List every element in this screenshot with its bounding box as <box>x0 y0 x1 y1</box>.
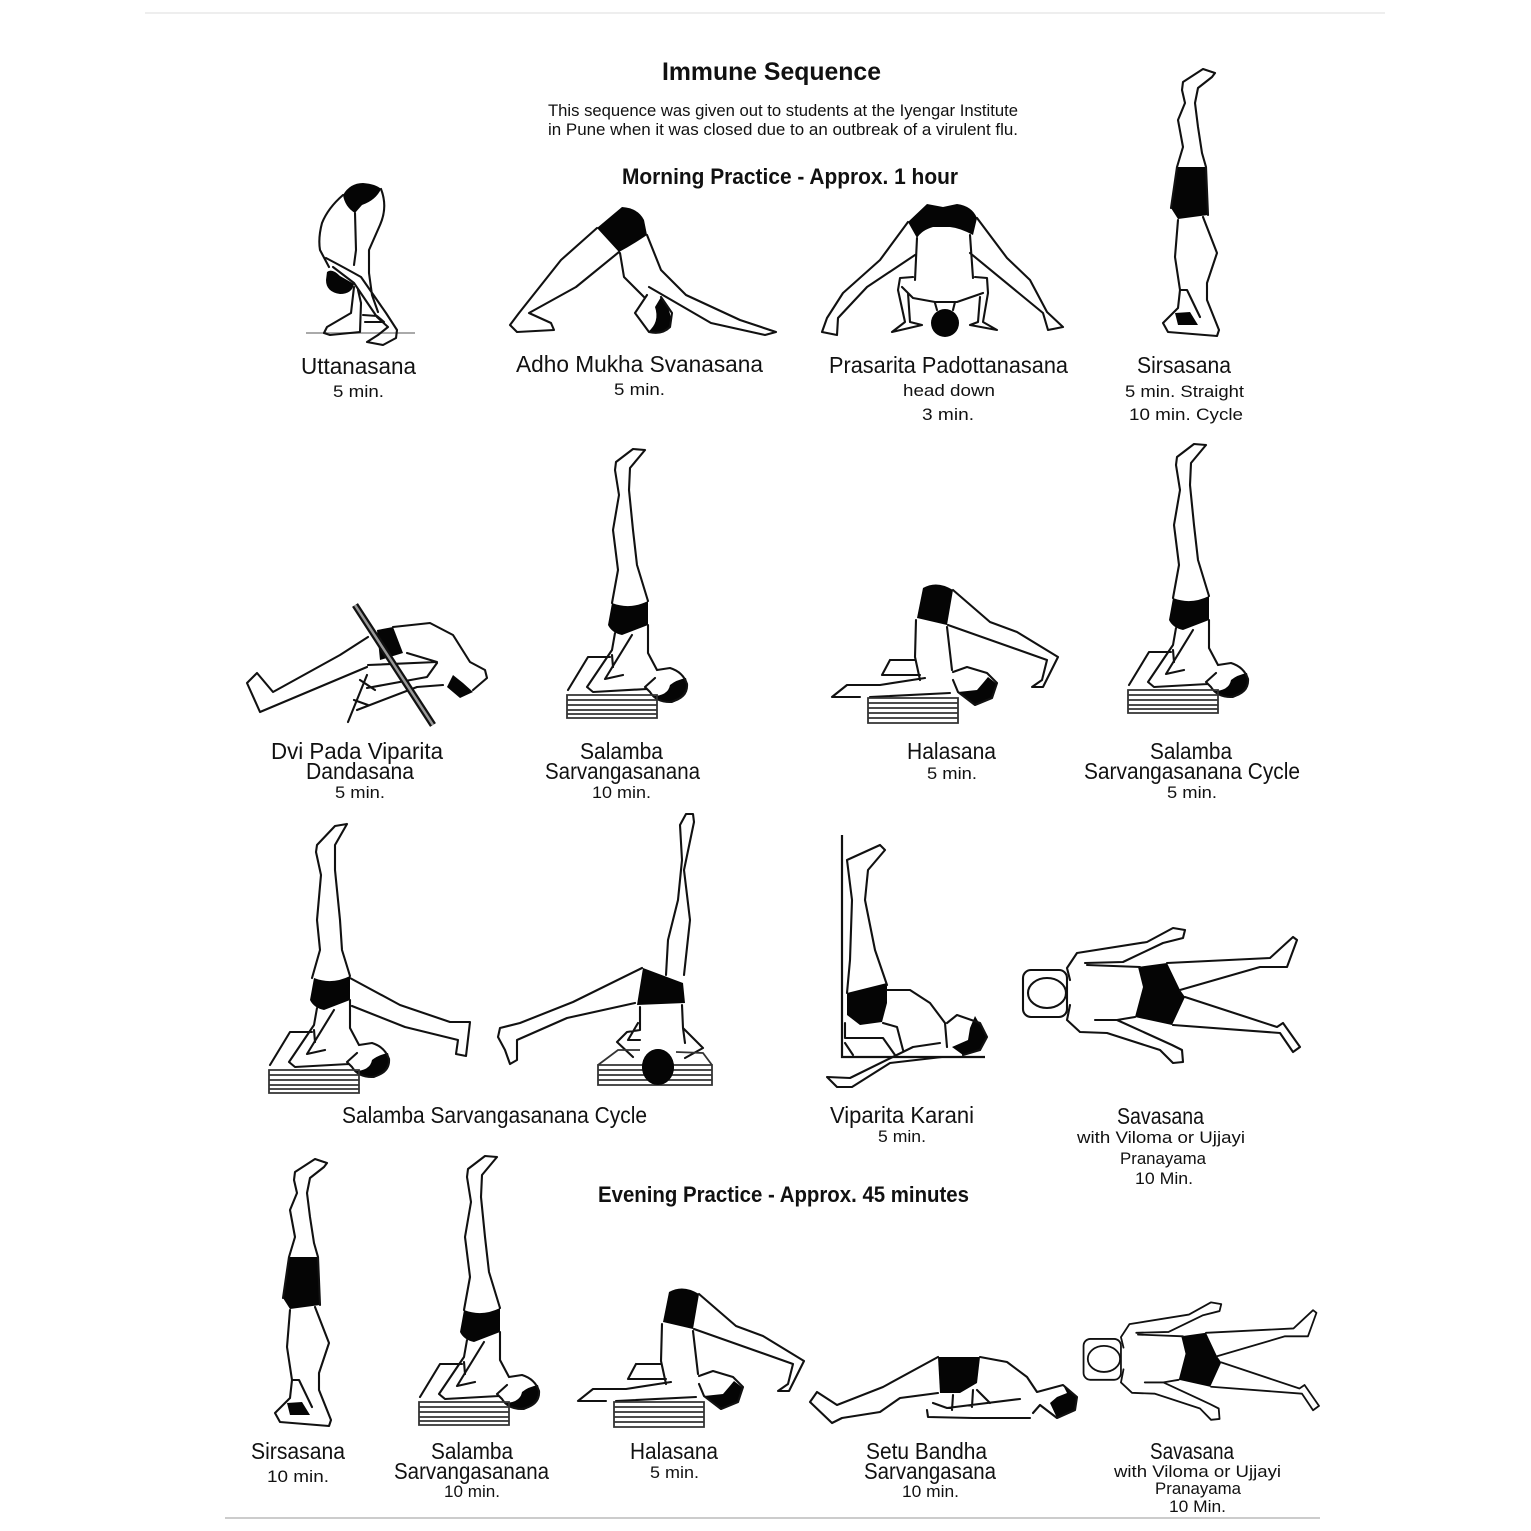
figure: plough pose <box>578 1288 804 1427</box>
caption <box>1076 1103 1245 1188</box>
panel: Sirsasana <box>1125 69 1244 424</box>
figure: corpse pose <box>1023 928 1300 1063</box>
caption: Sirsasana <box>1137 352 1231 378</box>
panel: Salamba Sarvangasanana <box>545 449 700 802</box>
caption: Dvi Pada Viparita <box>271 738 443 764</box>
caption: Viparita Karani <box>830 1102 974 1128</box>
caption <box>1084 738 1300 802</box>
caption: Sarvangasanana <box>394 1458 549 1484</box>
heading: morning practice: Morning Practice - Approx. 1 hour <box>622 164 958 189</box>
panel: Savasana <box>1023 928 1300 1188</box>
figure: supported shoulderstand <box>419 1156 539 1425</box>
panel: Halasana evening <box>578 1288 804 1482</box>
intro text <box>548 101 1018 139</box>
figure: downward dog <box>510 207 776 335</box>
caption: 5 min. Straight <box>1125 382 1244 401</box>
intro text: in Pune when it was closed due to an outbreak of a virulent flu. <box>548 120 1018 139</box>
caption: 10 min. Cycle <box>1129 405 1243 424</box>
figure: one leg lowered, front view <box>498 814 712 1085</box>
panel: Viparita Karani <box>827 835 987 1146</box>
caption: Pranayama <box>1155 1479 1242 1498</box>
caption: 10 min. <box>444 1482 500 1501</box>
figure: one leg lowered sideways <box>269 824 470 1093</box>
caption <box>301 353 416 401</box>
caption: 5 min. <box>1167 783 1217 802</box>
caption: with Viloma or Ujjayi <box>1076 1128 1245 1147</box>
caption <box>545 738 700 802</box>
caption <box>251 1438 345 1486</box>
figure: backbend over chair <box>247 605 487 725</box>
caption: Sarvangasanana Cycle <box>1084 758 1300 784</box>
caption <box>394 1438 549 1501</box>
figure: corpse pose <box>1084 1302 1319 1420</box>
caption: 10 min. <box>902 1482 959 1501</box>
caption: Setu Bandha <box>866 1438 987 1464</box>
caption: Sarvangasanana <box>545 758 700 784</box>
caption: Adho Mukha Svanasana <box>516 351 763 377</box>
figure: headstand <box>275 1159 331 1426</box>
title: Immune Sequence <box>662 58 881 86</box>
panel: Prasarita Padottanasana <box>822 204 1068 424</box>
caption: 5 min. <box>614 380 665 399</box>
caption: Sirsasana <box>251 1438 345 1464</box>
panel: Salamba Sarvangasanana Cycle pair <box>269 814 712 1128</box>
caption: head down <box>903 381 995 400</box>
panel: Savasana evening <box>1084 1302 1319 1516</box>
caption: Salamba Sarvangasanana Cycle <box>342 1102 647 1128</box>
caption: 5 min. <box>927 764 977 783</box>
figure: legs up the wall <box>827 835 987 1087</box>
panel: Adho Mukha Svanasana <box>510 207 776 399</box>
figure: supported bridge <box>810 1357 1077 1423</box>
caption: Salamba <box>431 1438 513 1464</box>
figure: standing forward bend <box>306 183 415 345</box>
caption: Salamba <box>1150 738 1232 764</box>
caption: 3 min. <box>922 405 974 424</box>
panel: Salamba Sarvangasanana evening <box>394 1156 549 1501</box>
panel: Salamba Sarvangasanana Cycle <box>1084 444 1300 802</box>
figure: wide-leg forward bend <box>822 204 1063 337</box>
caption: 5 min. <box>335 783 385 802</box>
caption: Salamba <box>580 738 663 764</box>
caption: 10 min. <box>592 783 651 802</box>
figure: plough pose <box>832 584 1058 723</box>
panel: Setu Bandha Sarvangasana <box>810 1357 1077 1501</box>
caption: Pranayama <box>1120 1149 1207 1168</box>
caption: with Viloma or Ujjayi <box>1113 1462 1281 1481</box>
figure: supported shoulderstand <box>1128 444 1248 713</box>
caption <box>271 738 443 802</box>
panel: Sirsasana evening <box>251 1159 345 1486</box>
caption: 10 Min. <box>1169 1497 1226 1516</box>
caption <box>516 351 763 399</box>
caption: Savasana <box>1150 1438 1234 1464</box>
caption: Savasana <box>1117 1103 1204 1129</box>
caption <box>630 1438 718 1482</box>
caption <box>907 738 996 783</box>
caption <box>830 1102 974 1146</box>
caption <box>1125 352 1244 424</box>
caption: 10 Min. <box>1135 1169 1193 1188</box>
caption: Halasana <box>630 1438 718 1464</box>
caption <box>864 1438 996 1501</box>
caption: Sarvangasana <box>864 1458 996 1484</box>
panel: Uttanasana <box>301 183 416 401</box>
caption: Halasana <box>907 738 996 764</box>
caption: Prasarita Padottanasana <box>829 352 1068 378</box>
caption: 5 min. <box>878 1127 926 1146</box>
caption: 5 min. <box>650 1463 699 1482</box>
panel: Halasana <box>832 584 1058 783</box>
caption: Uttanasana <box>301 353 416 379</box>
caption: 10 min. <box>267 1467 329 1486</box>
intro text: This sequence was given out to students at the Iyengar Institute <box>548 101 1018 120</box>
figure: headstand <box>1163 69 1219 336</box>
panel: Dvi Pada Viparita Dandasana <box>247 605 487 802</box>
caption <box>1113 1438 1281 1516</box>
caption <box>829 352 1068 424</box>
figure: supported shoulderstand <box>567 449 687 718</box>
caption: 5 min. <box>333 382 384 401</box>
caption: Dandasana <box>306 758 414 784</box>
heading: evening practice: Evening Practice - Approx. 45 minutes <box>598 1182 969 1207</box>
